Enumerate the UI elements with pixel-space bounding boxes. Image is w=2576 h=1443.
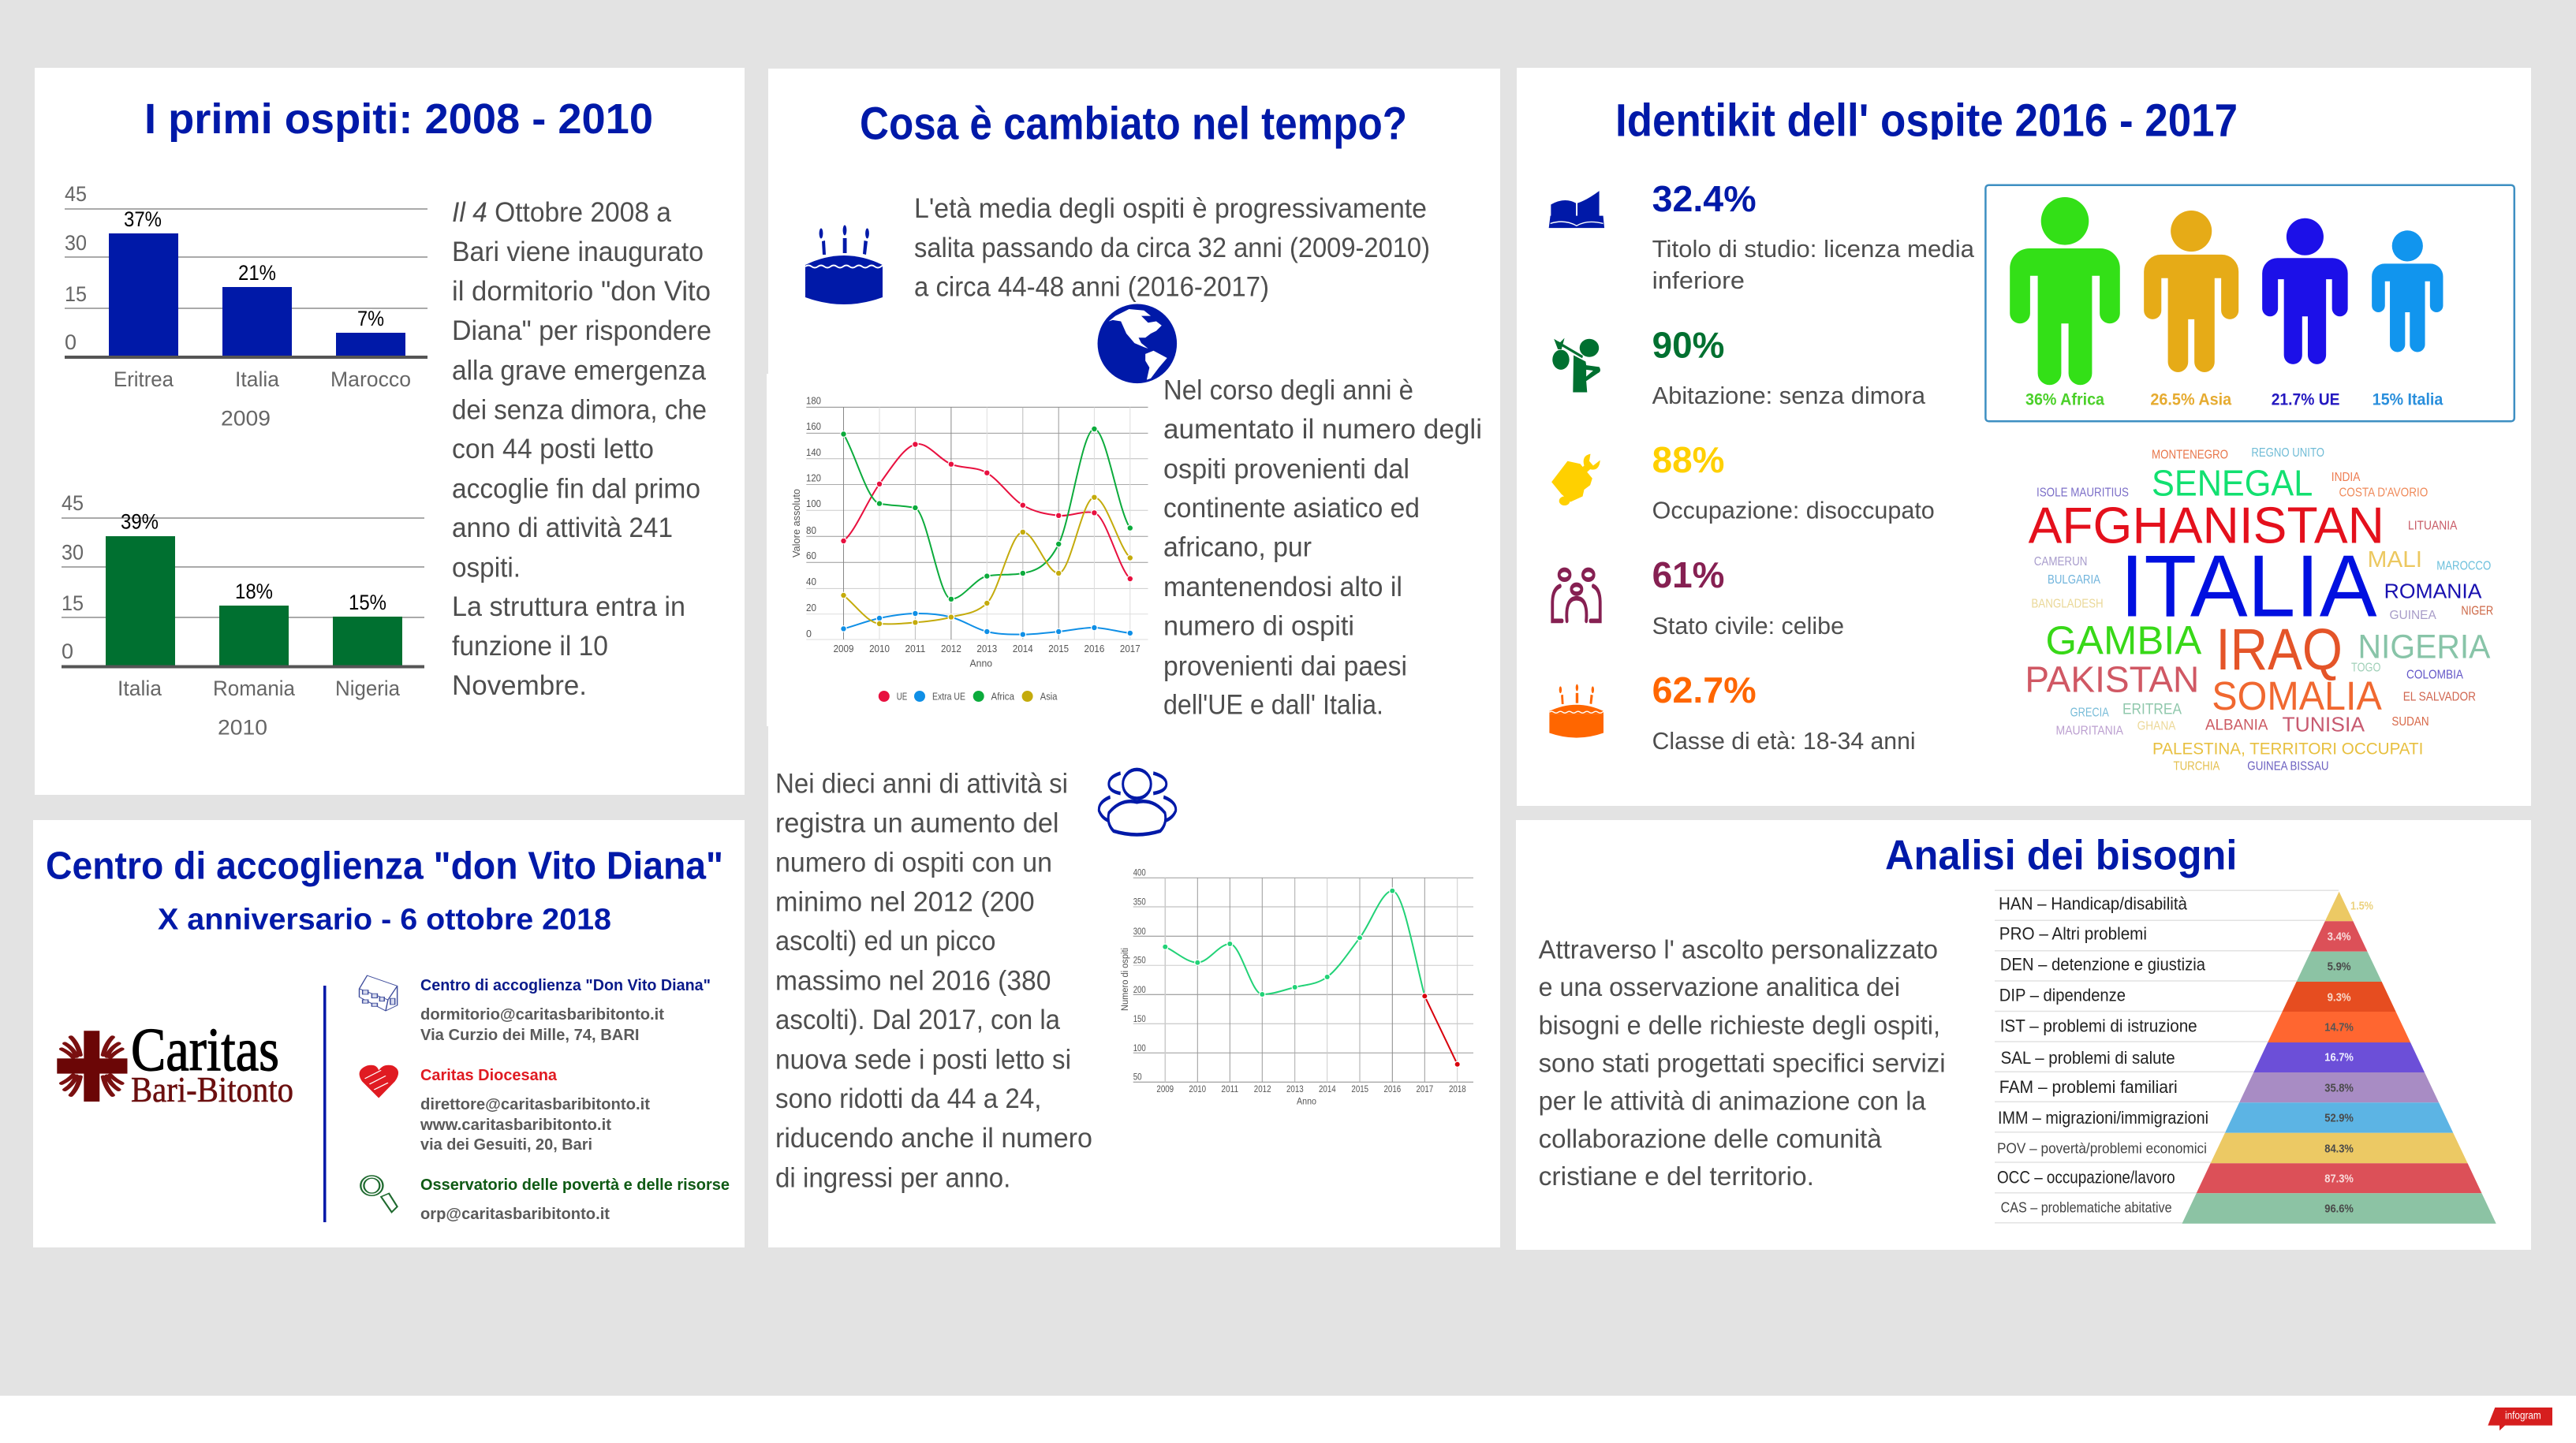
pyramid chart: bisogni: HAN – Handicap/disabilità bbox=[1999, 894, 2188, 914]
bar chart: 2009: 37% bbox=[124, 207, 162, 231]
word cloud: paesi di provenienza: PALESTINA, TERRITORI OCCUPATI bbox=[2152, 740, 2423, 759]
word cloud: paesi di provenienza: MAROCCO bbox=[2436, 560, 2491, 573]
line chart: ospiti per provenienza: Valore assoluto bbox=[791, 489, 802, 557]
line chart: numero di ospiti: 2015 bbox=[1351, 1085, 1368, 1094]
line chart: numero di ospiti: 300 bbox=[1133, 927, 1146, 937]
pyramid chart: bisogni: 35.8% bbox=[2324, 1081, 2354, 1094]
text block: età media: salita passando da circa 32 anni (2009-2010) bbox=[914, 233, 1430, 263]
word cloud: paesi di provenienza: TURCHIA bbox=[2174, 760, 2220, 774]
icon: birthday cake bbox=[805, 226, 883, 304]
bar chart: 2010: 15 bbox=[62, 591, 84, 615]
text block: età media: L'età media degli ospiti è progressivamente bbox=[914, 193, 1427, 224]
bar chart: 2010: 18% bbox=[235, 580, 273, 603]
bar chart: 2009: 30 bbox=[65, 231, 87, 255]
pyramid chart: bisogni: DEN – detenzione e giustizia bbox=[2000, 955, 2206, 975]
pyramid chart: bisogni: 84.3% bbox=[2324, 1142, 2354, 1155]
line chart: ospiti per provenienza: 80 bbox=[806, 525, 816, 536]
line chart: numero di ospiti: 400 bbox=[1133, 869, 1146, 878]
word cloud: paesi di provenienza: ITALIA bbox=[2120, 538, 2377, 636]
pyramid chart: bisogni: OCC – occupazione/lavoro bbox=[1997, 1168, 2175, 1188]
contact: Caritas Diocesana bbox=[420, 1066, 650, 1154]
bar chart: 2010: 39% bbox=[121, 509, 159, 533]
figure: Italia bbox=[2372, 230, 2443, 352]
text block: provenienza ospiti: aumentato il numero degli bbox=[1163, 414, 1482, 445]
line chart: ospiti per provenienza: 120 bbox=[806, 473, 821, 484]
line chart: numero di ospiti: 2010 bbox=[1189, 1085, 1206, 1094]
pyramid chart: bisogni: IST – problemi di istruzione bbox=[2000, 1016, 2197, 1035]
line chart: ospiti per provenienza: 2015 bbox=[1048, 643, 1069, 654]
line chart: ospiti per provenienza: 60 bbox=[806, 550, 816, 561]
word cloud: paesi di provenienza: ALBANIA bbox=[2205, 717, 2268, 734]
stat: titolo di studio: inferiore bbox=[1652, 267, 1745, 294]
text block: storia del dormitorio: anno di attività 241 bbox=[452, 513, 673, 543]
pyramid chart: bisogni bbox=[1995, 890, 2496, 1224]
heading: Analisi dei bisogni: Analisi dei bisogni bbox=[1885, 833, 2237, 878]
text block: ascolto personalizzato: per le attività di animazione con la bbox=[1539, 1087, 1926, 1115]
pyramid chart: bisogni: 16.7% bbox=[2324, 1051, 2354, 1065]
bar chart: 2010 bbox=[62, 491, 424, 740]
figure: Asia bbox=[2144, 211, 2238, 372]
line chart: ospiti per provenienza: 160 bbox=[806, 421, 821, 432]
legend: UE bbox=[897, 692, 907, 703]
heading: Identikit: Identikit dell' ospite 2016 - 2017 bbox=[1615, 95, 2238, 147]
heading: I primi ospiti: I primi ospiti: 2008 - 2010 bbox=[144, 95, 653, 143]
word cloud: paesi di provenienza: REGNO UNITO bbox=[2251, 446, 2324, 460]
line chart: numero di ospiti: 2011 bbox=[1221, 1085, 1238, 1094]
pyramid chart: bisogni: 3.4% bbox=[2328, 930, 2351, 944]
text block: provenienza ospiti: mantenendosi alto il bbox=[1163, 572, 1402, 602]
text block: provenienza ospiti: Nel corso degli anni è bbox=[1163, 375, 1413, 405]
line chart: numero di ospiti: 2018 bbox=[1449, 1085, 1466, 1094]
pyramid chart: bisogni: 5.9% bbox=[2328, 960, 2351, 974]
contact: Osservatorio bbox=[420, 1176, 730, 1223]
bar chart: 2009: Marocco bbox=[330, 367, 411, 391]
stat: classe di età: Classe di età: 18-34 anni bbox=[1652, 727, 1916, 755]
text block: dieci anni di attività bbox=[775, 768, 1092, 1194]
contact: Osservatorio: orp@caritasbaribitonto.it bbox=[420, 1205, 610, 1223]
word cloud: paesi di provenienza: SENEGAL bbox=[2152, 462, 2313, 503]
stat: occupazione bbox=[1652, 439, 1935, 524]
word cloud: paesi di provenienza bbox=[2025, 446, 2493, 774]
line chart: numero di ospiti: 2009 bbox=[1156, 1085, 1174, 1094]
subheading: X anniversario: X anniversario - 6 ottobre 2018 bbox=[158, 904, 611, 937]
word cloud: paesi di provenienza: IRAQ bbox=[2216, 617, 2343, 682]
text block: storia del dormitorio: funzione il 10 bbox=[452, 631, 608, 662]
line chart: numero di ospiti: 150 bbox=[1133, 1015, 1146, 1024]
stat: classe di età: 62.7% bbox=[1652, 669, 1757, 710]
contact: Caritas Diocesana: www.caritasbaribitonto.it bbox=[420, 1116, 611, 1134]
figure: UE bbox=[2262, 218, 2348, 364]
word cloud: paesi di provenienza: MAURITANIA bbox=[2055, 725, 2123, 738]
bar chart: 2009 bbox=[65, 182, 427, 431]
logo: Caritas Bari-Bitonto: Bari-Bitonto bbox=[131, 1069, 293, 1109]
text block: ascolto personalizzato: collaborazione delle comunità bbox=[1539, 1124, 1882, 1153]
bar chart: 2009: 15 bbox=[65, 282, 87, 306]
word cloud: paesi di provenienza: GHANA bbox=[2137, 720, 2176, 733]
bar chart: 2010: 30 bbox=[62, 541, 84, 565]
text block: storia del dormitorio: Il 4 Ottobre 2008 a bbox=[452, 197, 672, 228]
line chart: ospiti per provenienza: Anno bbox=[970, 658, 992, 669]
text block: dieci anni di attività: riducendo anche il numero bbox=[775, 1123, 1092, 1154]
text block: ascolto personalizzato bbox=[1539, 934, 1946, 1191]
icon: homeless person bbox=[1552, 338, 1600, 393]
line chart: ospiti per provenienza: 2011 bbox=[905, 643, 925, 654]
pictogram labels: 26.5% Asia bbox=[2150, 390, 2231, 408]
bar chart: 2010: 45 bbox=[62, 491, 84, 515]
pyramid chart: bisogni: CAS – problematiche abitative bbox=[2001, 1199, 2172, 1215]
line chart: numero di ospiti: Anno bbox=[1297, 1098, 1316, 1107]
icon: globe bbox=[1098, 304, 1177, 383]
line chart: ospiti per provenienza: 0 bbox=[806, 628, 812, 639]
stat: abitazione: Abitazione: senza dimora bbox=[1652, 382, 1926, 409]
text block: storia del dormitorio: accoglie fin dal primo bbox=[452, 473, 700, 505]
text block: ascolto personalizzato: bisogni e delle richieste degli ospiti, bbox=[1539, 1010, 1940, 1039]
text block: dieci anni di attività: Nei dieci anni di attività si bbox=[775, 768, 1068, 800]
line chart: ospiti per provenienza: 2010 bbox=[869, 643, 890, 654]
word cloud: paesi di provenienza: EL SALVADOR bbox=[2403, 691, 2476, 704]
contact: Caritas Diocesana: Caritas Diocesana bbox=[420, 1066, 558, 1084]
word cloud: paesi di provenienza: NIGER bbox=[2461, 604, 2493, 617]
text block: dieci anni di attività: nuova sede i posti letto si bbox=[775, 1044, 1071, 1076]
text block: provenienza ospiti: provenienti dai paesi bbox=[1163, 651, 1407, 681]
contact: Centro di accoglienza bbox=[420, 976, 711, 1044]
text block: dieci anni di attività: sono ridotti da 44 a 24, bbox=[775, 1083, 1041, 1114]
panel: Centro di accoglienza bbox=[33, 820, 745, 1247]
contact: Centro di accoglienza: Via Curzio dei Mille, 74, BARI bbox=[420, 1026, 639, 1044]
text block: storia del dormitorio: Novembre. bbox=[452, 670, 587, 701]
line chart: numero di ospiti: 2016 bbox=[1383, 1085, 1401, 1094]
word cloud: paesi di provenienza: ROMANIA bbox=[2384, 580, 2482, 603]
word cloud: paesi di provenienza: GAMBIA bbox=[2046, 617, 2201, 662]
pictogram labels: 21.7% UE bbox=[2272, 390, 2339, 408]
word cloud: paesi di provenienza: AFGHANISTAN bbox=[2029, 496, 2384, 554]
contact: Centro di accoglienza: dormitorio@caritasbaribitonto.it bbox=[420, 1005, 664, 1024]
line chart: numero di ospiti bbox=[1121, 869, 1473, 1107]
word cloud: paesi di provenienza: GUINEA BISSAU bbox=[2247, 760, 2328, 774]
text block: provenienza ospiti: africano, pur bbox=[1163, 531, 1312, 563]
bar chart: 2009: Italia bbox=[235, 367, 280, 391]
text block: ascolto personalizzato: Attraverso l' ascolto personalizzato bbox=[1539, 934, 1938, 964]
text block: dieci anni di attività: numero di ospiti con un bbox=[775, 847, 1052, 878]
text block: provenienza ospiti bbox=[1163, 375, 1482, 721]
text block: provenienza ospiti: numero di ospiti bbox=[1163, 610, 1354, 642]
pyramid chart: bisogni: SAL – problemi di salute bbox=[2001, 1048, 2175, 1068]
icon: orange cake bbox=[1549, 684, 1603, 738]
text block: ascolto personalizzato: sono stati progettati specifici servizi bbox=[1539, 1048, 1946, 1077]
word cloud: paesi di provenienza: SOMALIA bbox=[2212, 673, 2382, 718]
word cloud: paesi di provenienza: TUNISIA bbox=[2283, 712, 2365, 736]
bar chart: 2009: 7% bbox=[357, 307, 384, 330]
icon: house bbox=[360, 975, 398, 1011]
bar chart: 2010: 15% bbox=[349, 591, 386, 614]
pictogram labels: 36% Africa bbox=[2025, 390, 2104, 408]
bar chart: 2009: 45 bbox=[65, 182, 87, 206]
line chart: numero di ospiti: 2017 bbox=[1417, 1085, 1433, 1094]
line chart: ospiti per provenienza: 2013 bbox=[976, 643, 997, 654]
line chart: ospiti per provenienza: 140 bbox=[806, 447, 821, 458]
heading: Centro di accoglienza: Centro di accoglienza "don Vito Diana" bbox=[46, 845, 723, 888]
line chart: ospiti per provenienza: 2012 bbox=[941, 643, 961, 654]
heading: Cosa è cambiato: Cosa è cambiato nel tempo? bbox=[860, 98, 1407, 150]
bar chart: 2009: 2009 bbox=[221, 407, 271, 431]
pictogram labels: 15% Italia bbox=[2373, 390, 2443, 408]
text block: storia del dormitorio: il dormitorio "don Vito bbox=[452, 276, 711, 307]
stat: titolo di studio: Titolo di studio: licenza media bbox=[1652, 235, 1975, 263]
pyramid chart: bisogni: IMM – migrazioni/immigrazioni bbox=[1998, 1108, 2208, 1128]
pyramid chart: bisogni: 52.9% bbox=[2324, 1112, 2354, 1125]
bar chart: 2009: 21% bbox=[238, 261, 276, 285]
panel: Identikit dell'ospite bbox=[1517, 68, 2531, 806]
icon: fist with wrench bbox=[1551, 454, 1600, 505]
pyramid chart: bisogni: POV – povertà/problemi economici bbox=[1997, 1140, 2207, 1156]
legend: Asia bbox=[1040, 692, 1058, 703]
word cloud: paesi di provenienza: COSTA D'AVORIO bbox=[2339, 486, 2428, 499]
line chart: numero di ospiti: 250 bbox=[1133, 956, 1146, 966]
contact: Caritas Diocesana: via dei Gesuiti, 20, Bari bbox=[420, 1135, 592, 1154]
word cloud: paesi di provenienza: SUDAN bbox=[2391, 715, 2429, 729]
word cloud: paesi di provenienza: NIGERIA bbox=[2358, 628, 2491, 666]
text block: storia del dormitorio: con 44 posti letto bbox=[452, 434, 654, 464]
line chart: ospiti per provenienza: 2017 bbox=[1120, 643, 1141, 654]
text block: dieci anni di attività: ascolti) ed un picco bbox=[775, 926, 995, 956]
text block: età media bbox=[914, 193, 1430, 303]
text block: provenienza ospiti: dell'UE e dall' Italia. bbox=[1163, 689, 1383, 721]
stat: stato civile: 61% bbox=[1652, 554, 1724, 595]
pictogram box: provenienza bbox=[1985, 185, 2514, 421]
panel: I primi ospiti 2008-2010 bbox=[35, 68, 745, 795]
icon: magnifier bbox=[360, 1176, 398, 1212]
bar chart: 2010: 2010 bbox=[218, 716, 267, 740]
contact: Caritas Diocesana: direttore@caritasbaribitonto.it bbox=[420, 1095, 650, 1113]
contact: Osservatorio: Osservatorio delle povertà e delle risorse bbox=[420, 1176, 730, 1194]
pyramid chart: bisogni: 14.7% bbox=[2324, 1021, 2354, 1035]
word cloud: paesi di provenienza: ISOLE MAURITIUS bbox=[2037, 486, 2129, 499]
legend: Extra UE bbox=[932, 692, 965, 703]
stat: abitazione bbox=[1652, 324, 1926, 409]
text block: ascolto personalizzato: e una osservazione analitica dei bbox=[1539, 972, 1900, 1001]
line chart: ospiti per provenienza: 2016 bbox=[1084, 643, 1104, 654]
bar chart: 2010: Italia bbox=[118, 677, 162, 700]
legend bbox=[879, 691, 1058, 703]
word cloud: paesi di provenienza: TOGO bbox=[2351, 662, 2380, 675]
line chart: numero di ospiti: 100 bbox=[1133, 1044, 1146, 1053]
contact: Centro di accoglienza: Centro di accoglienza "Don Vito Diana" bbox=[420, 976, 711, 994]
figure: Africa bbox=[2010, 197, 2120, 385]
line chart: ospiti per provenienza: 180 bbox=[806, 396, 821, 407]
pyramid chart: bisogni: 96.6% bbox=[2324, 1202, 2354, 1215]
icon: book bbox=[1549, 191, 1604, 228]
text block: dieci anni di attività: ascolti). Dal 2017, con la bbox=[775, 1005, 1060, 1035]
text block: storia del dormitorio: La struttura entra in bbox=[452, 591, 685, 622]
line chart: numero di ospiti: 200 bbox=[1133, 986, 1146, 995]
word cloud: paesi di provenienza: LITUANIA bbox=[2408, 520, 2458, 533]
bar chart: 2010: Romania bbox=[213, 677, 296, 700]
bar chart: 2009: 0 bbox=[65, 330, 77, 354]
pyramid chart: bisogni: FAM – problemi familiari bbox=[1999, 1077, 2178, 1097]
line chart: ospiti per provenienza: 40 bbox=[806, 576, 816, 587]
pyramid chart: bisogni: 9.3% bbox=[2328, 991, 2351, 1005]
icon: people group bbox=[1099, 770, 1176, 834]
pyramid chart: bisogni: 87.3% bbox=[2324, 1172, 2354, 1185]
word cloud: paesi di provenienza: MONTENEGRO bbox=[2152, 449, 2228, 462]
text block: dieci anni di attività: registra un aumento del bbox=[775, 807, 1058, 839]
logo: Caritas Bari-Bitonto bbox=[57, 1015, 293, 1109]
stat: occupazione: Occupazione: disoccupato bbox=[1652, 497, 1935, 524]
word cloud: paesi di provenienza: COLOMBIA bbox=[2406, 669, 2463, 682]
stat: stato civile: Stato civile: celibe bbox=[1652, 612, 1844, 639]
text block: provenienza ospiti: ospiti provenienti dal bbox=[1163, 454, 1409, 484]
word cloud: paesi di provenienza: MALI bbox=[2368, 547, 2422, 572]
logo: Caritas Bari-Bitonto: Caritas bbox=[131, 1015, 279, 1083]
legend: Africa bbox=[991, 692, 1014, 703]
line chart: ospiti per provenienza: 2009 bbox=[834, 643, 853, 654]
line chart: ospiti per provenienza: 2014 bbox=[1013, 643, 1033, 654]
pictogram labels bbox=[2025, 390, 2443, 408]
word cloud: paesi di provenienza: ERITREA bbox=[2122, 702, 2182, 718]
logo: infogram bbox=[2488, 1408, 2552, 1430]
text block: età media: a circa 44-48 anni (2016-2017) bbox=[914, 271, 1269, 303]
word cloud: paesi di provenienza: INDIA bbox=[2331, 471, 2361, 484]
text block: dieci anni di attività: minimo nel 2012 (200 bbox=[775, 886, 1035, 918]
text block: ascolto personalizzato: cristiane e del territorio. bbox=[1539, 1161, 1814, 1191]
word cloud: paesi di provenienza: PAKISTAN bbox=[2025, 658, 2199, 699]
line chart: numero di ospiti: Numero di ospiti bbox=[1121, 948, 1130, 1011]
icon: heart hands bbox=[360, 1065, 398, 1098]
text block: storia del dormitorio: Bari viene inaugurato bbox=[452, 237, 704, 267]
text block: storia del dormitorio: Diana" per rispondere bbox=[452, 315, 711, 346]
line chart: ospiti per provenienza: 20 bbox=[806, 602, 816, 613]
bar chart: 2010: Nigeria bbox=[335, 677, 401, 700]
pyramid chart: bisogni: DIP – dipendenze bbox=[1999, 986, 2126, 1005]
word cloud: paesi di provenienza: CAMERUN bbox=[2034, 555, 2087, 569]
line chart: numero di ospiti: 2013 bbox=[1286, 1085, 1304, 1094]
line chart: numero di ospiti: 2012 bbox=[1254, 1085, 1271, 1094]
line chart: ospiti per provenienza bbox=[791, 396, 1148, 703]
icon: people outline bbox=[1552, 570, 1600, 621]
stat: occupazione: 88% bbox=[1652, 439, 1724, 480]
line chart: numero di ospiti: 50 bbox=[1133, 1072, 1142, 1082]
word cloud: paesi di provenienza: GUINEA bbox=[2390, 609, 2436, 622]
line chart: numero di ospiti: 2014 bbox=[1319, 1085, 1336, 1094]
text block: dieci anni di attività: di ingressi per anno. bbox=[775, 1162, 1010, 1194]
text block: provenienza ospiti: continente asiatico ed bbox=[1163, 493, 1420, 524]
stat: titolo di studio bbox=[1652, 178, 1975, 294]
stat: classe di età bbox=[1652, 669, 1916, 755]
panel: Cosa è cambiato nel tempo bbox=[767, 69, 1500, 1247]
panel: Analisi dei bisogni bbox=[1516, 820, 2531, 1250]
text block: storia del dormitorio bbox=[452, 197, 711, 701]
logo: infogram: infogram bbox=[2505, 1408, 2541, 1421]
pyramid chart: bisogni: 1.5% bbox=[2350, 900, 2373, 913]
stat: titolo di studio: 32.4% bbox=[1652, 178, 1757, 219]
word cloud: paesi di provenienza: GRECIA bbox=[2070, 706, 2109, 719]
stat: abitazione: 90% bbox=[1652, 324, 1724, 365]
bar chart: 2010: 0 bbox=[62, 639, 73, 663]
pyramid chart: bisogni: PRO – Altri problemi bbox=[1999, 924, 2147, 944]
text block: storia del dormitorio: ospiti. bbox=[452, 552, 521, 584]
stat: stato civile bbox=[1652, 554, 1844, 639]
word cloud: paesi di provenienza: BANGLADESH bbox=[2031, 597, 2104, 610]
text block: storia del dormitorio: dei senza dimora, che bbox=[452, 394, 707, 426]
line chart: ospiti per provenienza: 100 bbox=[806, 498, 821, 509]
line chart: numero di ospiti: 350 bbox=[1133, 897, 1146, 907]
text block: storia del dormitorio: alla grave emergenza bbox=[452, 355, 707, 386]
bar chart: 2009: Eritrea bbox=[114, 367, 174, 391]
text block: dieci anni di attività: massimo nel 2016 (380 bbox=[775, 965, 1051, 997]
word cloud: paesi di provenienza: BULGARIA bbox=[2048, 573, 2100, 587]
